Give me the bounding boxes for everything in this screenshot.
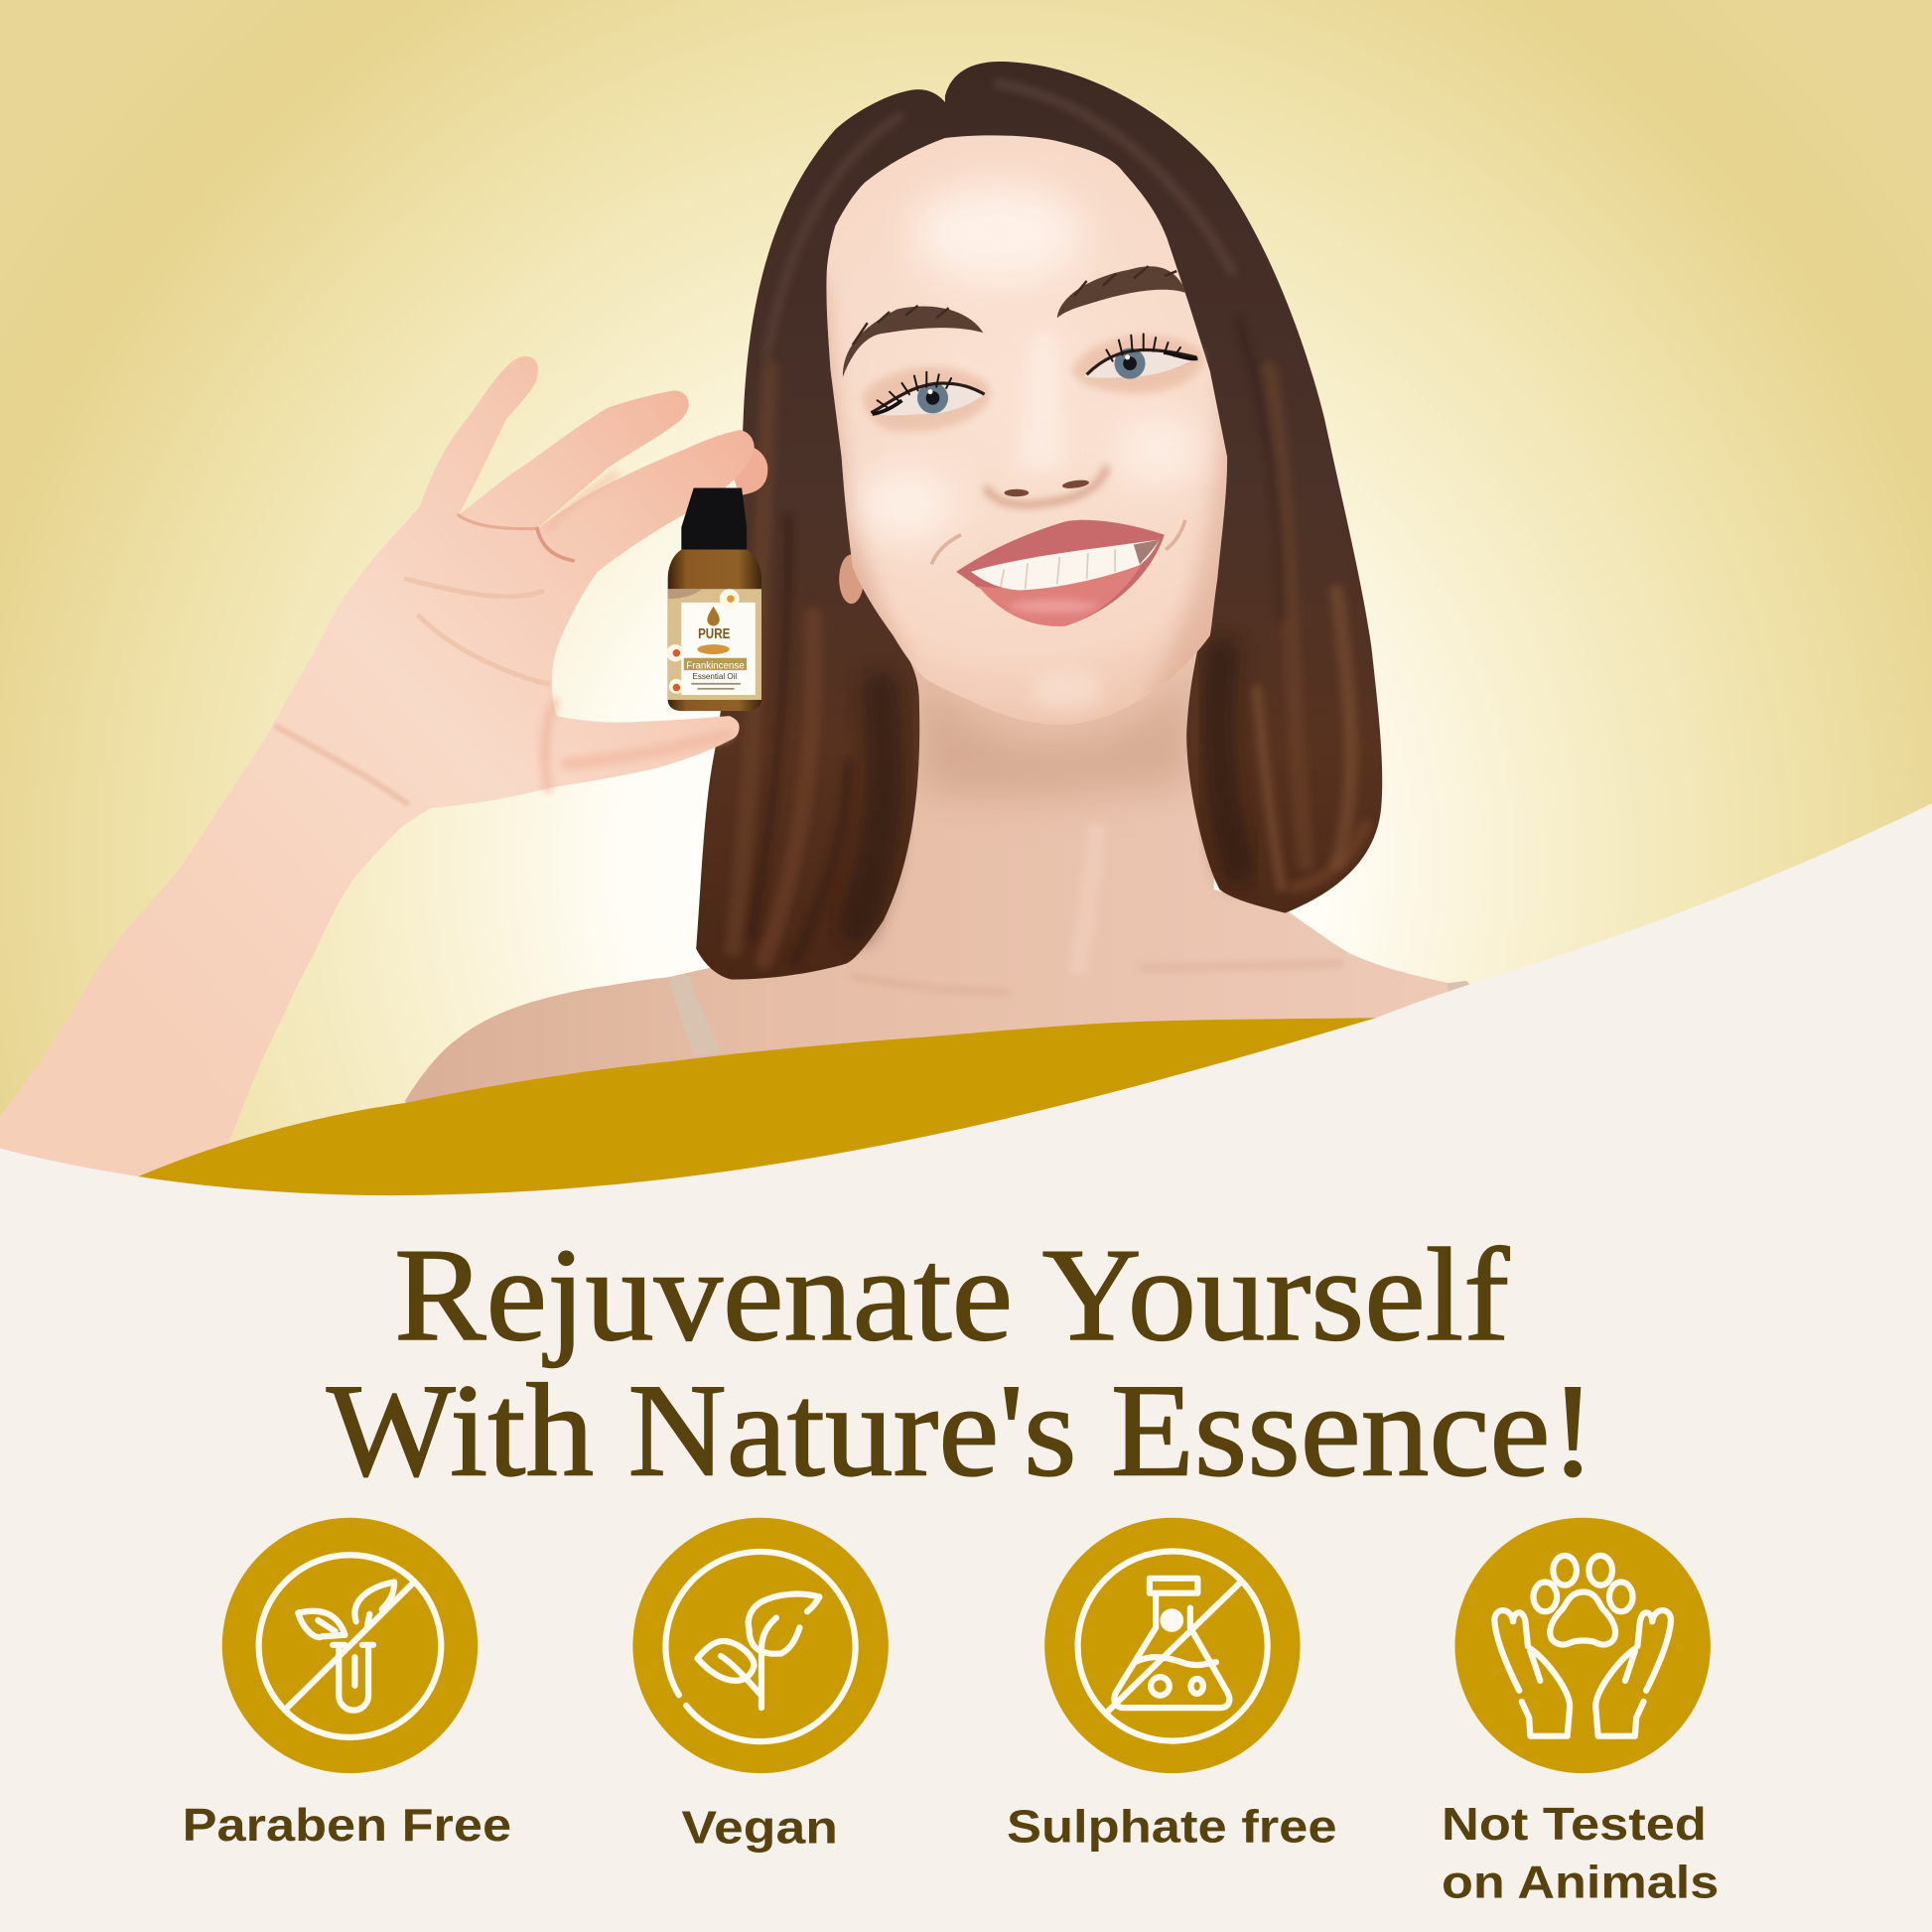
frankincense resin [697,644,730,654]
shadow under chin [918,665,1197,799]
eye socket right [1072,335,1203,393]
badge circle [1454,1518,1711,1773]
bottle cap [681,487,747,550]
nose bridge highlight [1017,333,1066,469]
woman portrait holding bottle [0,62,1472,1189]
right eyebrow [1057,266,1186,318]
icon: no parabens [259,1555,441,1737]
Essential Oil label text: Essential Oil [692,672,737,681]
label flowers [666,589,740,694]
Frankincense label text: Frankincense [686,659,745,671]
heading line 2: With Nature's Essence! [327,1357,1595,1504]
index fingertip behind bottle [727,446,767,495]
background gradient [0,0,1932,1232]
PURE logo [698,607,730,642]
label [1442,1798,1719,1907]
feature: Paraben Free [183,1518,511,1851]
feature: Not Tested on Animals [1442,1518,1719,1907]
left eyebrow [843,306,983,377]
badge circle [1044,1518,1301,1773]
label: Paraben Free [183,1799,511,1851]
face shading [801,185,1257,710]
label: Sulphate free [1007,1800,1337,1852]
name band [684,658,747,670]
icon: no chemicals flask [1078,1552,1268,1741]
cream curved panel [0,803,1932,1932]
collarbone shading [850,964,1343,992]
mouth [956,520,1165,626]
hand and arm [0,356,755,1189]
dress strap [669,975,720,1056]
smile lines [931,520,1185,564]
PURE logo: PURE [698,626,730,642]
hair strands and highlights [733,83,1365,961]
nose [986,466,1106,504]
eye socket left [863,366,990,432]
face [826,135,1227,725]
label line 2: on Animals [1442,1856,1719,1907]
bottle label [668,589,761,700]
label line 1: Not Tested [1442,1798,1707,1850]
badge circle [632,1518,889,1773]
ear [839,554,864,604]
label white panel [681,603,756,695]
label: Vegan [681,1802,838,1854]
bottle label fine print [691,684,741,689]
right dress strap [1447,981,1472,1001]
badge circle [222,1518,478,1773]
left eye [871,372,985,415]
neck tendon highlight [1078,826,1097,973]
right eye [1084,334,1197,379]
heading [327,1221,1595,1504]
icon: leaf sprout [665,1552,856,1741]
icon: paw and hands [1494,1556,1671,1736]
gold swoosh [123,1018,1380,1213]
neck and chest [405,617,1472,1182]
palm shading and creases [277,475,727,803]
feature: Vegan [632,1518,889,1854]
bottle body [668,550,761,711]
heading line 1: Rejuvenate Yourself [394,1221,1510,1368]
hair [696,62,1382,980]
product bottle [666,487,761,711]
feature: Sulphate free [1007,1518,1337,1852]
